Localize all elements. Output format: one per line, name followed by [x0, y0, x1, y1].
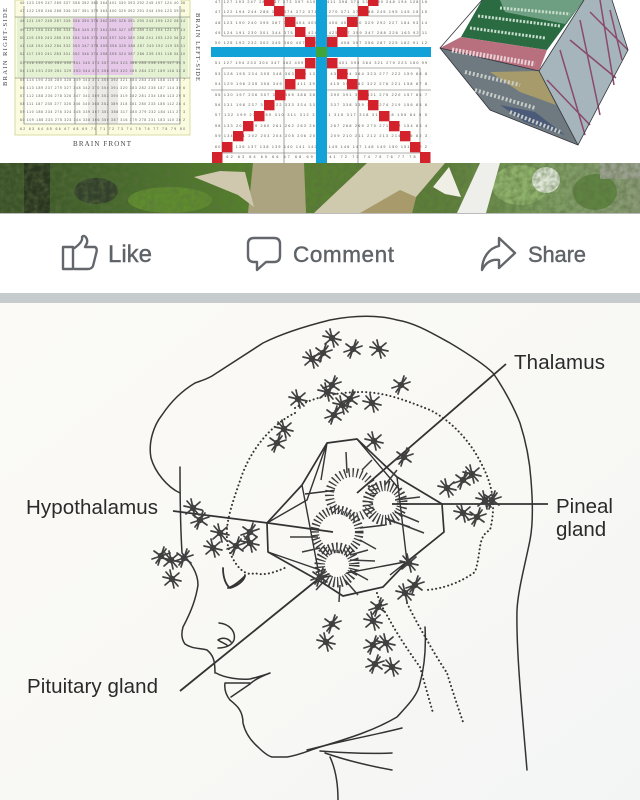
diagram panel: head with glands — [0, 303, 640, 800]
chart: magic square with red diagonals and blue cross: 57 132 199 238 259 310 311 312 313 41 315 317 318 319 218 155 84 5 5 — [215, 113, 427, 117]
head outline — [150, 316, 532, 800]
icon: number cube — [440, 0, 628, 145]
label: pituitary gland: Pituitary gland — [27, 675, 158, 698]
button: comment — [248, 238, 395, 270]
label: pineal gland: gland — [556, 518, 606, 541]
button: like: Like — [108, 241, 152, 268]
divider bar — [0, 293, 640, 303]
button: like — [63, 236, 152, 269]
label: hypothalamus: Hypothalamus — [26, 496, 158, 519]
chart: brain number grid: 49 120 196 244 286 334 355 349 377 361 398 327 390 289 242 194 121 37 13 — [20, 28, 185, 32]
chart: brain number grid: 48 121 197 245 287 335 356 350 378 362 399 328 391 290 243 195 122 38 14 — [20, 19, 185, 23]
label: pineal gland: Pineal — [556, 495, 613, 518]
chart: brain number grid: 59 110 186 234 276 324 345 339 367 351 388 317 380 279 232 184 111 27 3 — [20, 110, 185, 114]
label: brain right-side: BRAIN RIGHT-SIDE — [2, 8, 9, 86]
icon: thumbs up — [63, 236, 97, 269]
chart: magic square with red diagonals and blue cross: 54 129 196 235 306 349 364 411 393 41 415 393 362 322 276 221 158 87 8 — [215, 82, 427, 86]
button: share: Share — [528, 242, 586, 267]
chart: magic square with red diagonals and blue cross — [211, 0, 431, 163]
chart: magic square with red diagonals and blue cross: 61 62 63 64 65 66 67 68 69 70 41 72 73 74 75 76 77 78 79 — [215, 155, 427, 159]
icon: share arrow — [482, 238, 515, 270]
chart: magic square with red diagonals and blue cross: 47 127 193 247 289 337 373 397 410 41 411 398 374 338 290 248 194 128 16 — [215, 0, 427, 4]
chart: magic square with red diagonals and blue cross: 51 127 194 233 304 347 362 409 428 41 429 401 393 364 321 279 223 160 99 — [215, 61, 427, 65]
polyhedron — [267, 439, 444, 596]
chart: brain number grid: 54 115 191 239 281 329 350 344 372 356 393 322 385 284 237 189 116 32 8 — [20, 69, 185, 73]
photo: tree trunks — [0, 163, 640, 214]
chart: brain number grid: 58 111 187 235 277 325 346 340 368 352 389 318 381 280 233 185 112 28 4 — [20, 102, 185, 106]
gland spheres — [290, 452, 424, 602]
chart: magic square with red diagonals and blue cross: 60 135 136 137 138 139 140 141 142 41 145 146 147 148 149 150 151 152 2 — [215, 145, 427, 149]
button: comment: Comment — [293, 242, 395, 267]
chart: magic square with red diagonals and blue cross: 58 133 200 239 260 261 262 263 264 41 267 268 269 270 271 272 154 83 4 — [215, 124, 427, 128]
chart: magic square with red diagonals and blue cross: 47 122 194 244 286 342 374 372 371 41 270 371 372 288 245 195 145 15 15 — [215, 10, 427, 14]
chart: magic square with red diagonals and blue cross: 53 128 195 234 305 348 363 410 138 41 432 394 364 323 277 222 159 88 8 — [215, 72, 427, 76]
chart: magic square with red diagonals and blue cross: 48 123 190 240 395 367 379 404 405 41 406 405 380 329 292 227 164 93 14 — [215, 21, 427, 25]
pointer lines — [173, 364, 548, 691]
asterisks: energy points — [152, 329, 501, 676]
label: thalamus: Thalamus — [514, 351, 605, 374]
chart: brain number grid: 52 117 193 241 283 331 352 346 374 358 395 324 387 286 239 191 118 34 10 — [20, 52, 185, 56]
chart: magic square with red diagonals and blue cross: 59 134 201 202 203 204 205 206 207 41 209 210 211 212 213 214 215 82 3 — [215, 134, 427, 138]
chart: brain number grid: 46 123 199 247 289 337 358 352 380 364 401 330 393 292 245 197 124 40 36 — [20, 1, 185, 5]
label: brain front: BRAIN FRONT — [73, 140, 132, 148]
chart: magic square with red diagonals and blue cross: 55 130 197 236 307 350 365 388 389 41 390 391 352 321 275 220 157 86 7 — [215, 93, 427, 97]
chart: brain number grid: 50 119 195 243 285 333 354 348 376 360 397 326 389 288 241 193 120 36 12 — [20, 36, 185, 40]
chart: brain number grid: 55 114 190 238 280 328 349 343 371 355 392 321 384 283 236 188 115 31 7 — [20, 78, 185, 82]
chart: brain number grid: 41 118 194 242 284 332 353 347 375 359 396 325 388 287 240 192 119 35 11 — [20, 44, 185, 48]
button: share — [482, 238, 586, 270]
chart: magic square with red diagonals and blue cross: 49 124 191 230 301 344 375 408 424 41 425 407 359 347 288 226 163 92 11 — [215, 31, 427, 35]
chart: brain number grid: 56 113 189 237 279 327 348 342 370 354 391 320 383 282 235 187 114 30 6 — [20, 86, 185, 90]
chart: brain number grid: 47 122 198 246 288 336 357 351 379 363 400 329 392 291 244 196 123 39 35 — [20, 9, 185, 13]
chart: brain number grid: 57 112 188 236 278 326 347 341 369 353 390 319 382 281 234 186 113 29 5 — [20, 94, 185, 98]
chart: magic square with red diagonals and blue cross: 56 131 198 237 308 322 333 334 335 41 337 338 339 320 274 219 156 85 6 — [215, 103, 427, 107]
label: brain left-side: BRAIN LEFT-SIDE — [194, 13, 201, 81]
chart: brain number grid: 60 109 185 233 275 323 344 338 366 350 387 316 379 278 231 183 110 26 2 — [20, 118, 185, 122]
icon: speech bubble — [248, 238, 280, 270]
dotted brain outline — [227, 392, 493, 722]
chart: brain number grid: 53 116 192 240 282 330 351 345 373 357 394 323 386 285 238 190 117 33 9 — [20, 61, 185, 65]
chart: magic square with red diagonals and blue cross: 50 125 192 232 302 345 360 407 426 41 427 408 397 356 287 225 162 91 12 — [215, 41, 427, 45]
chart: brain number grid: 62 63 64 65 66 67 68 69 70 71 72 73 74 75 76 77 78 79 80 — [20, 127, 185, 131]
chart: brain number grid — [15, 0, 190, 135]
